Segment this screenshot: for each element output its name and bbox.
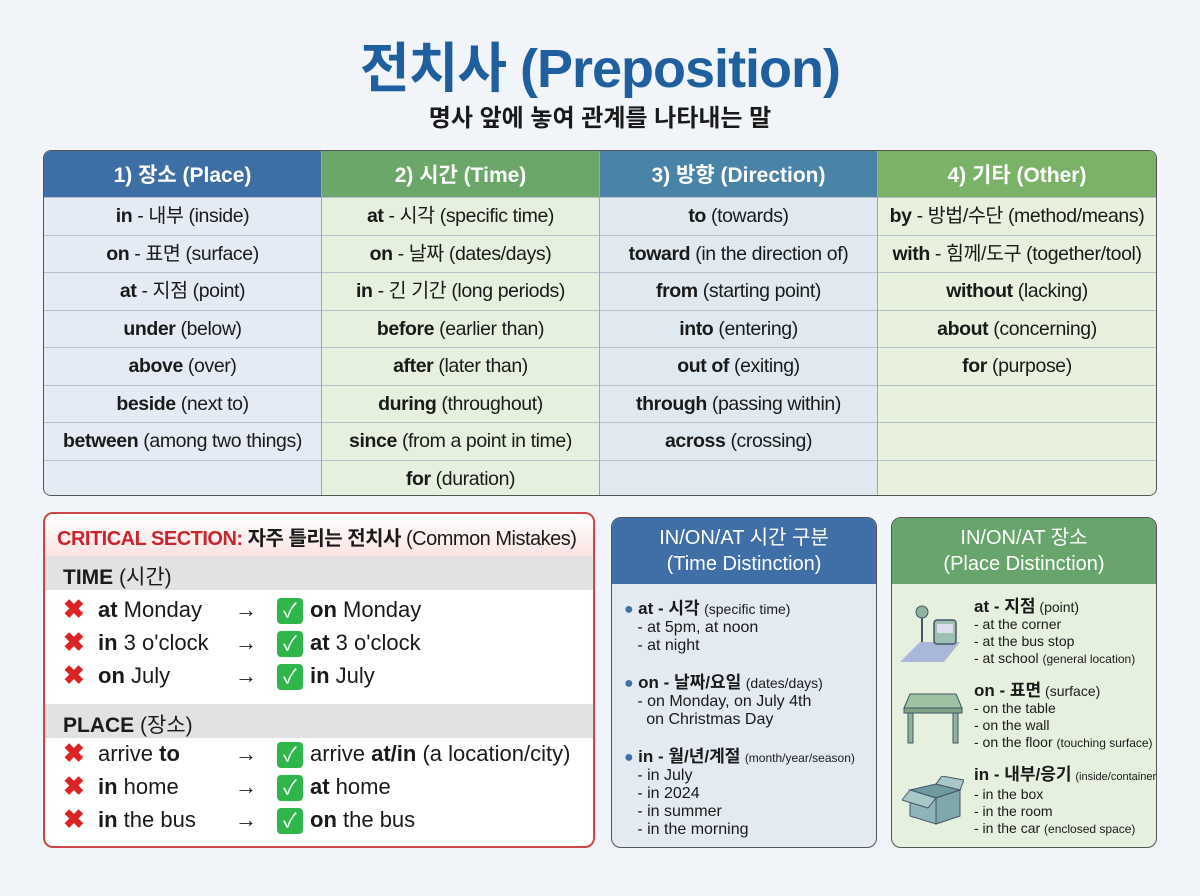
at place block: - at school (general location) xyxy=(974,650,1135,666)
at time block: ● at - 시각 (specific time) xyxy=(624,599,790,618)
in place block: - in the room xyxy=(974,803,1053,819)
column: other: for (purpose) xyxy=(962,355,1072,377)
column: time: during (throughout) xyxy=(378,392,543,414)
panel: common mistakes: on Monday xyxy=(310,597,421,622)
panel: common mistakes: → xyxy=(235,663,257,688)
at time block: - at night xyxy=(637,637,700,654)
at place block: at - 지점 (point) xyxy=(974,597,1079,616)
column: place: beside (next to) xyxy=(116,392,249,414)
in place block: - in the box xyxy=(974,786,1043,802)
in place block xyxy=(974,765,1157,836)
in time block: - in the morning xyxy=(637,821,748,838)
column: place: between (among two things) xyxy=(63,430,302,452)
panel: common mistakes: ✖ xyxy=(63,738,85,768)
panel: place distinction: IN/ON/AT 장소 xyxy=(960,527,1088,549)
column: other: without (lacking) xyxy=(946,280,1088,302)
panel: common mistakes: arrive at/in (a location/city) xyxy=(310,741,570,766)
column: direction: out of (exiting) xyxy=(677,355,800,377)
panel: common mistakes xyxy=(43,512,595,848)
at place block xyxy=(974,597,1135,666)
panel: common mistakes: ✓ xyxy=(283,600,297,622)
panel: common mistakes: ✖ xyxy=(63,594,85,624)
panel: common mistakes: → xyxy=(235,597,257,622)
panel: common mistakes: at 3 o'clock xyxy=(310,630,421,655)
time section xyxy=(45,556,593,590)
column: other: 4) 기타 (Other) xyxy=(948,164,1086,187)
on place block xyxy=(974,681,1153,750)
column: time: on - 날짜 (dates/days) xyxy=(370,242,551,264)
at place block: - at the corner xyxy=(974,616,1061,632)
column: time: since (from a point in time) xyxy=(349,430,572,452)
in place block: in - 내부/응기 (inside/container) xyxy=(974,765,1157,784)
column: other: with - 힘께/도구 (together/tool) xyxy=(892,242,1142,264)
icon: box xyxy=(902,776,964,825)
column: place: in - 내부 (inside) xyxy=(116,205,249,227)
on time block: on Christmas Day xyxy=(646,711,773,728)
icon: table xyxy=(903,694,963,744)
column: place xyxy=(44,151,322,495)
on place block: - on the wall xyxy=(974,717,1049,733)
column: place: 1) 장소 (Place) xyxy=(114,164,251,187)
column: other: about (concerning) xyxy=(937,318,1097,340)
in time block: - in 2024 xyxy=(637,785,700,802)
panel: common mistakes: ✖ xyxy=(63,627,85,657)
mistakes heading xyxy=(45,514,593,556)
column: direction: across (crossing) xyxy=(665,430,812,452)
in time block: ● in - 월/년/계절 (month/year/season) xyxy=(624,747,855,766)
panel: common mistakes: in July xyxy=(310,663,375,688)
panel: common mistakes: arrive to xyxy=(98,741,180,766)
column: place: above (over) xyxy=(129,355,236,377)
at time block xyxy=(624,599,790,654)
panel: common mistakes: ✖ xyxy=(63,771,85,801)
on place block: - on the floor (touching surface) xyxy=(974,734,1153,750)
panel: place distinction: (Place Distinction) xyxy=(943,553,1105,575)
column: direction: into (entering) xyxy=(679,318,798,340)
panel: time distinction: (Time Distinction) xyxy=(667,553,821,575)
on time block: ● on - 날짜/요일 (dates/days) xyxy=(624,673,823,692)
panel: time distinction: IN/ON/AT 시간 구분 xyxy=(659,527,829,549)
time section: TIME (시간) xyxy=(63,566,172,589)
panel: common mistakes: ✓ xyxy=(283,744,297,766)
panel: common mistakes: → xyxy=(235,807,257,832)
panel: common mistakes: at home xyxy=(310,774,391,799)
panel: common mistakes: on the bus xyxy=(310,807,415,832)
column: time: at - 시각 (specific time) xyxy=(367,205,554,227)
column: other: by - 방법/수단 (method/means) xyxy=(890,205,1144,227)
on place block: on - 표면 (surface) xyxy=(974,681,1100,700)
panel: place distinction xyxy=(891,517,1157,848)
column: place: at - 지점 (point) xyxy=(120,280,245,302)
subtitle: 명사 앞에 놓여 관계를 나타내는 말 xyxy=(429,105,771,132)
at place block: - at the bus stop xyxy=(974,633,1074,649)
column: direction: 3) 방향 (Direction) xyxy=(652,164,825,187)
panel: common mistakes: → xyxy=(235,630,257,655)
panel: common mistakes: ✓ xyxy=(283,633,297,655)
column: direction: from (starting point) xyxy=(656,280,821,302)
panel: common mistakes: → xyxy=(235,741,257,766)
column: time: 2) 시간 (Time) xyxy=(395,164,526,187)
panel: common mistakes: ✖ xyxy=(63,660,85,690)
panel: common mistakes: ✓ xyxy=(283,666,297,688)
column: time: after (later than) xyxy=(393,355,528,377)
on place block: - on the table xyxy=(974,700,1056,716)
panel: common mistakes: ✓ xyxy=(283,810,297,832)
panel: common mistakes: on July xyxy=(98,663,170,688)
title: 전치사 (Preposition) xyxy=(360,39,840,99)
column: place: under (below) xyxy=(123,318,242,340)
mistakes heading: CRITICAL SECTION: 자주 틀리는 전치사 (Common Mistakes) xyxy=(57,528,576,550)
column: time: before (earlier than) xyxy=(377,318,544,340)
in time block: - in summer xyxy=(637,803,722,820)
in time block: - in July xyxy=(637,767,692,784)
panel: common mistakes: in 3 o'clock xyxy=(98,630,209,655)
icon: bus stop xyxy=(900,606,960,662)
panel: time distinction xyxy=(611,517,877,848)
place section: PLACE (장소) xyxy=(63,714,193,737)
in place block: - in the car (enclosed space) xyxy=(974,820,1135,836)
panel: common mistakes: ✖ xyxy=(63,804,85,834)
column: other xyxy=(878,151,1156,495)
table: preposition categories xyxy=(43,150,1157,496)
column: direction xyxy=(600,151,878,495)
panel: common mistakes: → xyxy=(235,774,257,799)
column: direction: to (towards) xyxy=(688,205,789,227)
panel: common mistakes: in home xyxy=(98,774,179,799)
on time block xyxy=(624,673,823,728)
column: direction: through (passing within) xyxy=(636,392,841,414)
panel: common mistakes: in the bus xyxy=(98,807,196,832)
in time block xyxy=(624,747,855,838)
on time block: - on Monday, on July 4th xyxy=(637,693,811,710)
column: direction: toward (in the direction of) xyxy=(629,242,848,264)
place section xyxy=(45,704,593,738)
column: time xyxy=(322,151,600,495)
panel: common mistakes: at Monday xyxy=(98,597,202,622)
panel: common mistakes: ✓ xyxy=(283,777,297,799)
column: time: for (duration) xyxy=(406,468,515,490)
column: time: in - 긴 기간 (long periods) xyxy=(356,280,565,302)
column: place: on - 표면 (surface) xyxy=(106,242,259,264)
at time block: - at 5pm, at noon xyxy=(637,619,758,636)
